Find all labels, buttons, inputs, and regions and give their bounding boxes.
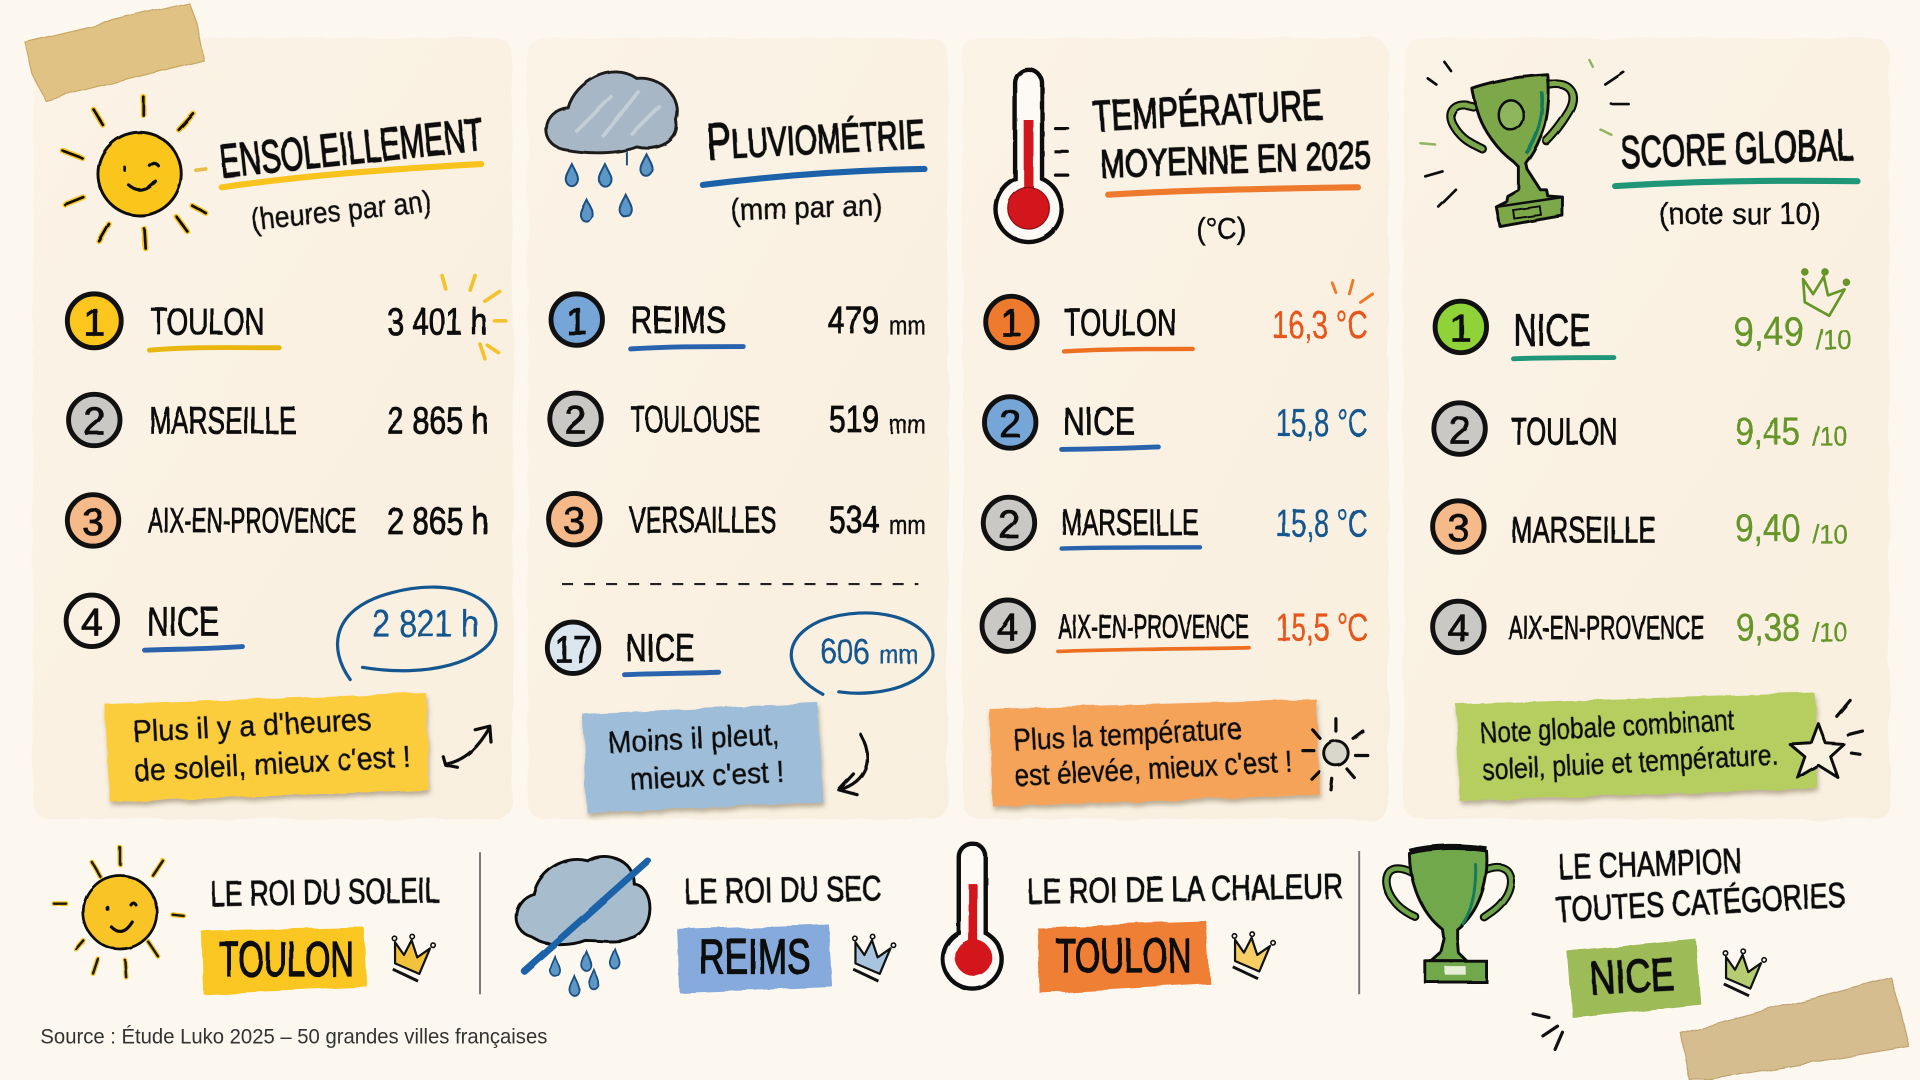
row 4: /10: [1812, 618, 1848, 648]
row 1: TOULON: [151, 301, 264, 343]
row 1: 1: [1001, 303, 1022, 346]
row 2: mm: [889, 411, 926, 439]
row 3: VERSAILLES: [629, 500, 776, 541]
row 3: [1433, 501, 1848, 552]
row 3: /10: [1812, 520, 1848, 550]
row 1: 9,49: [1734, 308, 1804, 354]
row 1: mm: [889, 312, 926, 340]
heading: ensoleillement: ENSOLEILLEMENT: [217, 108, 486, 187]
row 2: [550, 393, 926, 444]
icon: rain cloud: [546, 72, 677, 222]
row 2: [1434, 403, 1848, 454]
row 1: 3 401 h: [387, 301, 487, 343]
underline: [703, 169, 924, 185]
row 2: 9,45: [1735, 410, 1800, 453]
row 4: [982, 600, 1368, 651]
row 1: 479: [828, 300, 879, 342]
row 2: 519: [829, 399, 879, 441]
subtitle: (°C): [1196, 212, 1247, 246]
row 17: 17: [555, 629, 591, 671]
row 1: REIMS: [631, 300, 726, 342]
panel: ensoleillement: [33, 38, 513, 819]
row 2: /10: [1812, 422, 1848, 452]
row 2: MARSEILLE: [149, 400, 296, 442]
row 4: AIX-EN-PROVENCE: [1058, 609, 1249, 646]
row 17: NICE: [626, 627, 694, 670]
row 2: TOULON: [1511, 411, 1618, 453]
icon: sun: [62, 97, 206, 249]
icon: crown: [1226, 929, 1276, 981]
note: pluviométrie: Moins il pleut,: [607, 717, 780, 760]
row 2: [69, 394, 489, 446]
note: ensoleillement: de soleil, mieux c'est !: [133, 740, 411, 788]
row 2: TOULOUSE: [631, 399, 760, 440]
row 1: 1: [1450, 308, 1472, 351]
row 2: 2 865 h: [387, 400, 489, 442]
row 3: 2: [998, 504, 1020, 547]
note: ensoleillement: [105, 693, 429, 802]
note: ensoleillement: Plus il y a d'heures: [132, 703, 372, 749]
heading: pluviométrie: PLUVIOMÉTRIE: [705, 101, 926, 170]
note: pluviométrie: mieux c'est !: [629, 755, 785, 797]
row 3: MARSEILLE: [1511, 509, 1656, 550]
icon: trophy: [1386, 846, 1511, 982]
icon: trophy: [1420, 60, 1629, 227]
note: score global: Note globale combinant: [1479, 704, 1735, 750]
subtitle: (heures par an): [249, 184, 433, 237]
row 4: 4: [81, 602, 103, 645]
city badge: [1567, 939, 1701, 1018]
heading: LE ROI DU SOLEIL: [210, 870, 440, 914]
underline: [222, 164, 481, 187]
underline: [1615, 181, 1858, 186]
row 3: 3: [82, 501, 104, 544]
row 1: [551, 294, 926, 349]
row 3: 2 865 h: [387, 501, 489, 543]
icon: small sun: [1303, 719, 1368, 790]
heading: LE ROI DU SEC: [684, 868, 882, 912]
city name: REIMS: [699, 930, 811, 984]
winner: roi du sec: [516, 856, 897, 996]
icon: sparks: [1533, 1014, 1562, 1049]
row 2: NICE: [1063, 401, 1135, 444]
row 4: [66, 587, 496, 680]
row 3: mm: [889, 512, 926, 540]
row 17: [547, 613, 933, 694]
row 1: 1: [566, 300, 588, 343]
underline: [1108, 187, 1358, 195]
note: température: [989, 699, 1320, 807]
panel paper: [962, 38, 1389, 819]
row 3: MARSEILLE: [1062, 502, 1199, 543]
row 17: 606: [820, 632, 869, 672]
note: température: Plus la température: [1012, 712, 1243, 758]
tape: top left: [24, 2, 203, 100]
note: score global: [1456, 693, 1818, 801]
row 3: [549, 493, 926, 545]
row 3: AIX-EN-PROVENCE: [148, 501, 356, 541]
row 1: NICE: [1513, 304, 1591, 355]
row 17: mm: [879, 642, 918, 670]
row 1: [1435, 264, 1851, 359]
note: pluviométrie: [583, 703, 823, 813]
row 4: 4: [997, 606, 1019, 649]
row 4: 15,5 °C: [1276, 606, 1368, 649]
row 1: TOULON: [1064, 303, 1177, 345]
city badge: [1037, 921, 1210, 993]
icon: thermometer: [943, 844, 1002, 989]
row 1: [986, 280, 1373, 351]
icon: thermometer: [996, 70, 1068, 242]
row 3: 3: [563, 500, 585, 543]
tape: bottom right: [1681, 977, 1909, 1080]
winner: roi du soleil: [54, 847, 440, 994]
panel: pluviométrie: [528, 38, 948, 819]
row 2: 2: [83, 401, 105, 444]
subtitle: (mm par an): [730, 188, 883, 227]
row 1: [67, 276, 506, 359]
heading: LE ROI DE LA CHALEUR: [1027, 866, 1343, 912]
city name: TOULON: [219, 933, 354, 987]
row 3: 15,8 °C: [1276, 502, 1368, 545]
panel paper: [528, 38, 948, 819]
icon: double arrow: [443, 726, 491, 768]
row 3: [67, 495, 489, 546]
row 2: 15,8 °C: [1276, 402, 1368, 445]
subtitle: (note sur 10): [1659, 197, 1821, 231]
city badge: [677, 924, 833, 993]
icon: curved arrow: [839, 735, 867, 795]
panel: score global: [1403, 38, 1889, 819]
row 4: [1433, 601, 1848, 653]
note: température: est élevée, mieux c'est !: [1014, 745, 1293, 793]
heading: LE CHAMPION: [1558, 841, 1743, 887]
row 4: 4: [1447, 608, 1469, 651]
row 3: 3: [1447, 507, 1469, 550]
panel paper: [33, 38, 513, 819]
icon: cloud with slash: [516, 856, 650, 996]
row 4: AIX-EN-PROVENCE: [1509, 610, 1704, 647]
city name: TOULON: [1056, 930, 1191, 983]
row 3: [983, 497, 1368, 549]
panel paper: [1403, 38, 1889, 819]
panel: température: [962, 38, 1389, 819]
row 4: 9,38: [1736, 606, 1800, 649]
icon: crown: [386, 931, 436, 983]
panel: température: MOYENNE EN 2025: [1100, 134, 1372, 187]
row 3: 534: [829, 500, 879, 542]
heading: température: TEMPÉRATURE: [1091, 81, 1324, 141]
row 4: NICE: [147, 599, 219, 645]
city name: NICE: [1588, 948, 1676, 1004]
row 1: 16,3 °C: [1272, 304, 1368, 347]
winner: champion: [1386, 841, 1847, 1049]
row 2: 2: [565, 399, 586, 442]
row 3: 9,40: [1735, 507, 1800, 550]
icon: small sun: [54, 847, 184, 977]
icon: crown: [1717, 946, 1767, 998]
source: Source : Étude Luko 2025 – 50 grandes villes françaises: [40, 1025, 547, 1048]
row 1: 1: [83, 302, 105, 345]
icon: crown: [846, 931, 897, 983]
row 2: [984, 397, 1368, 449]
row 2: 2: [999, 403, 1021, 446]
winner: roi de la chaleur: [943, 844, 1343, 993]
row 4: 2 821 h: [372, 604, 479, 646]
city badge: [201, 927, 367, 994]
icon: star: [1790, 700, 1862, 778]
row 1: /10: [1816, 324, 1851, 355]
row 2: 2: [1449, 409, 1470, 452]
icon: outline crown: [1794, 264, 1851, 319]
note: score global: soleil, pluie et température.: [1481, 739, 1779, 787]
